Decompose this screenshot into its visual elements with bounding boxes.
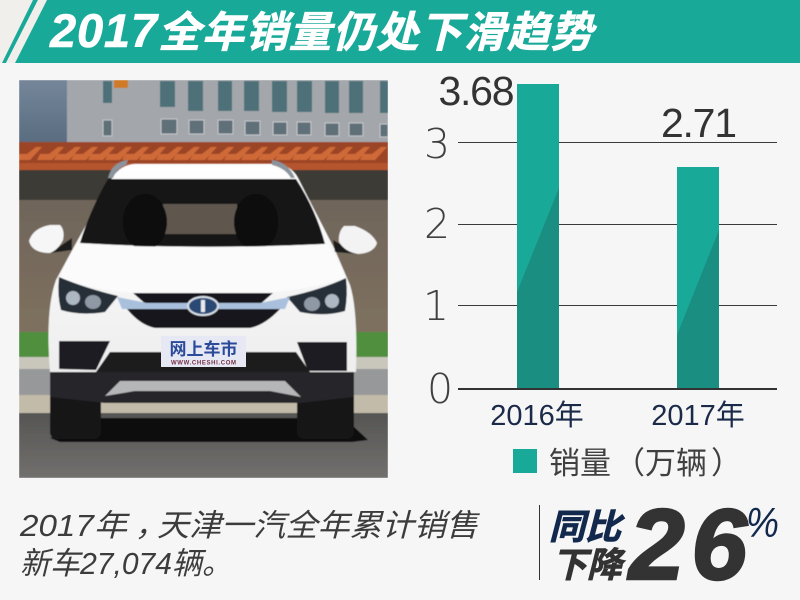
body text [19,508,480,581]
legend: 销量 [549,446,611,481]
number plate: WWW.CHESHI.COM [171,360,236,366]
grille [133,293,273,306]
bar chart: sales [423,68,777,481]
roof rails [108,160,128,178]
ground [19,332,388,358]
bar: 2016 [517,84,559,388]
divider [539,505,540,580]
title: 全年销量仍处下滑趋势 [158,10,597,57]
legend [513,446,742,481]
bumper vents [59,341,110,370]
lower bumper [50,372,354,403]
legend: （ [614,446,645,481]
callout: down 26%: % [746,499,779,546]
roof tiles [19,142,388,164]
grid lines [458,142,777,306]
legend: ） [711,446,742,481]
y-axis labels: 1 [423,282,449,330]
header banner [0,0,800,63]
mirrors [50,238,72,253]
headlights [58,277,118,314]
value label 2017: 2.71 [661,100,737,146]
photo: white SUV front view [19,80,388,478]
callout: down 26% [549,489,779,600]
y-axis labels: 2 [424,200,450,248]
body text: 天津一汽全年累计销售 [157,508,480,543]
hood [134,243,324,251]
number plate: 网上车市 [170,339,238,359]
category label 2017: 2017年 [651,399,745,432]
body text: 新车27,074辆。 [20,546,232,581]
shadow under car [50,418,368,442]
y-axis labels: 0 [427,365,453,413]
body text: 2017年 ， [20,508,166,543]
wheels [50,396,102,440]
building windows [103,81,388,113]
value label 2016: 3.68 [438,68,514,114]
category label 2016: 2016年 [490,399,584,432]
windscreen [80,179,325,247]
wall [19,199,388,333]
callout: down 26%: 26 [627,489,748,600]
axis [458,388,777,390]
car roof and body [48,164,356,372]
bar: 2017 [677,167,719,388]
legend: 万辆 [645,446,707,481]
title: 2017 [49,4,159,57]
y-axis labels: 3 [424,120,450,168]
callout: down 26%: 同比 [549,508,625,547]
number plate [161,336,246,367]
badge [188,297,218,315]
y-axis labels [423,120,453,413]
callout: down 26%: 下降 [552,546,626,585]
